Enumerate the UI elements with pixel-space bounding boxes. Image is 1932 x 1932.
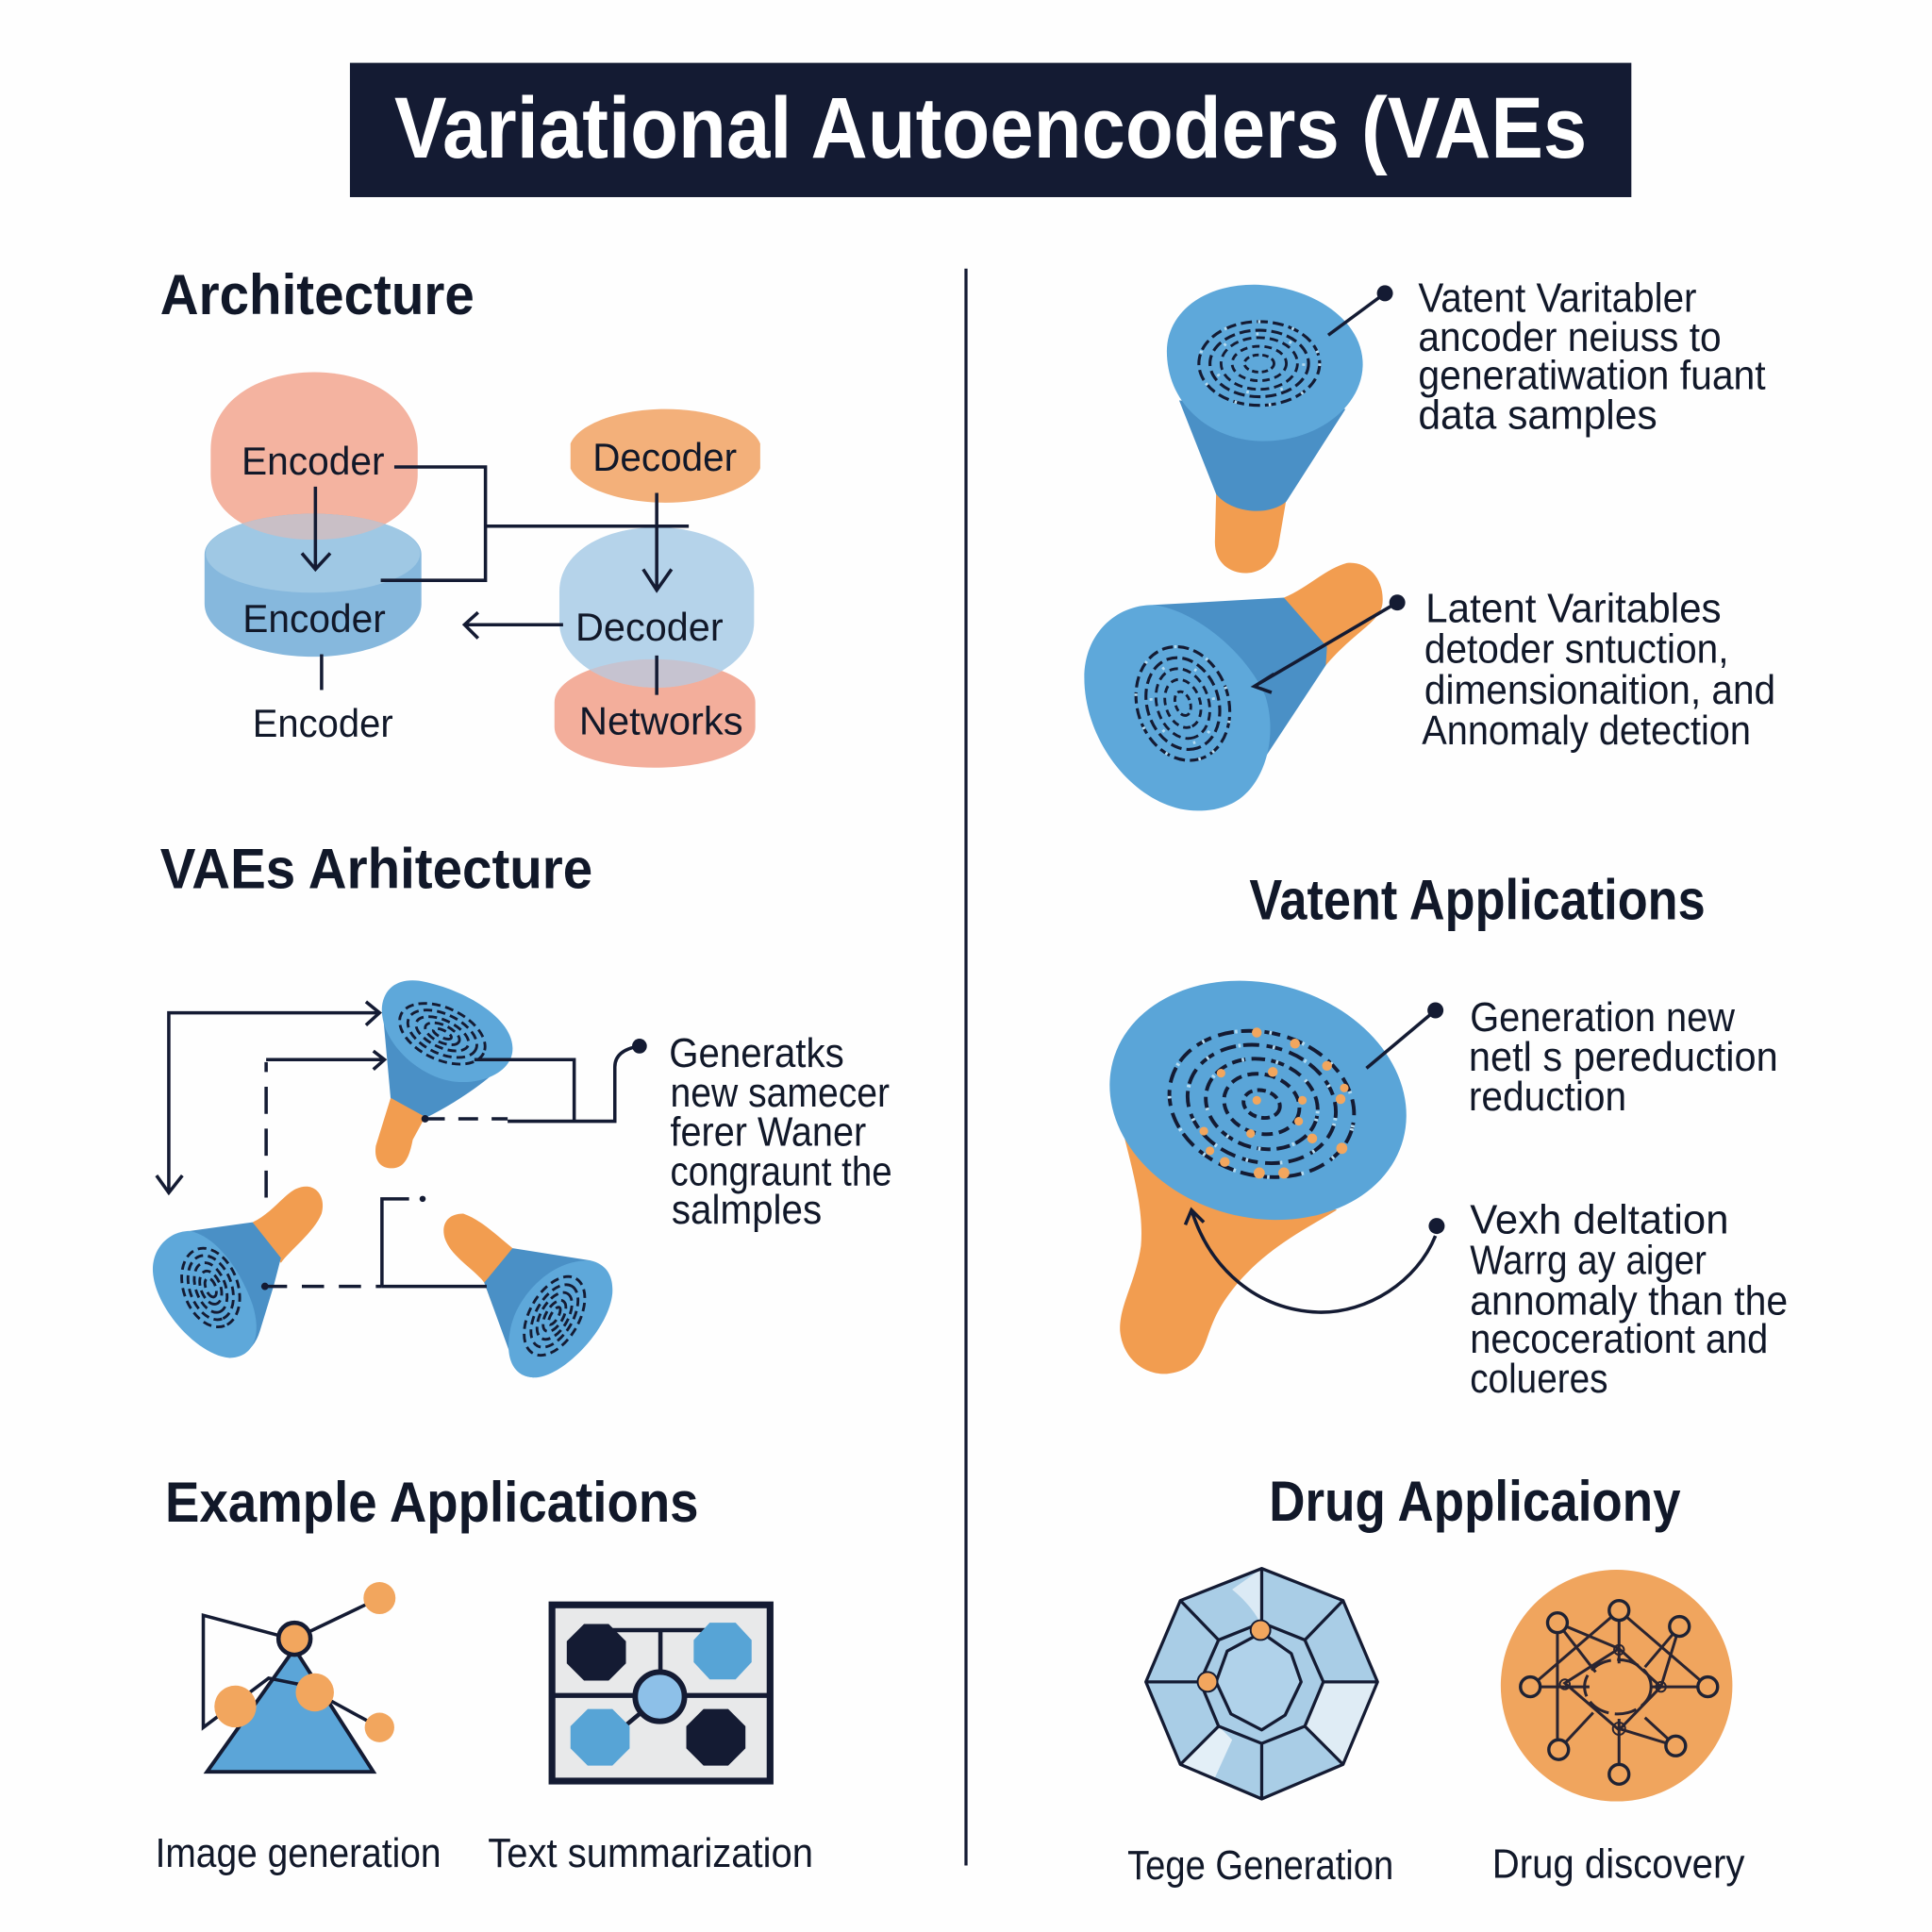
text block: anomaly: colueres bbox=[1470, 1357, 1607, 1402]
callout text: congraunt the bbox=[671, 1149, 892, 1194]
heading: Example Applications: Example Applications bbox=[165, 1471, 699, 1534]
text block: latent variables uses bbox=[1422, 587, 1775, 754]
cylinder labels: Encoder bbox=[242, 596, 386, 641]
orange ring dots bbox=[1200, 1027, 1349, 1178]
cylinder labels bbox=[242, 435, 743, 745]
label: drug discovery: Drug discovery bbox=[1492, 1842, 1745, 1888]
cone bottom left bbox=[153, 1187, 323, 1357]
callout text: new samecer bbox=[671, 1071, 890, 1116]
text block: latent variable description: ancoder neiuss to bbox=[1418, 315, 1722, 360]
text block: generation bbox=[1469, 995, 1778, 1120]
connector arrows bbox=[302, 467, 689, 695]
cone bottom right bbox=[443, 1214, 612, 1377]
callout text: salmples bbox=[672, 1188, 822, 1233]
cylinder labels: Decoder bbox=[575, 605, 724, 649]
text block: latent variable description: Vatent Varitabler bbox=[1418, 275, 1697, 321]
cone top bbox=[375, 980, 512, 1168]
cylinder labels: Networks bbox=[579, 698, 743, 742]
text block: anomaly: necocerationt and bbox=[1470, 1317, 1768, 1362]
icon: molecule on orange disc bbox=[1501, 1570, 1732, 1802]
decoder pill orange bbox=[571, 409, 760, 503]
label: tege generation: Tege Generation bbox=[1127, 1843, 1393, 1889]
heading: Architecture: Architecture bbox=[160, 263, 475, 326]
text block: latent variable description bbox=[1418, 275, 1766, 439]
text block: latent variable description: data samples bbox=[1418, 393, 1657, 439]
text block: latent variables uses: Latent Varitables bbox=[1425, 587, 1722, 632]
text block: generation: netl s pereduction bbox=[1469, 1035, 1778, 1080]
encoder cylinder blue bbox=[205, 514, 422, 657]
label: text summarization: Text summarization bbox=[488, 1831, 813, 1876]
text block: latent variables uses: detoder sntuction, bbox=[1424, 627, 1728, 673]
heading: Vatent Applications: Vatent Applications bbox=[1249, 868, 1706, 931]
text block: anomaly: Vexh deltation bbox=[1470, 1197, 1728, 1242]
decoder cylinder light blue bbox=[559, 527, 754, 688]
icon: faceted polyhedron bbox=[1146, 1569, 1377, 1799]
flow connector lines bbox=[157, 1002, 647, 1291]
heading: Drug Applicaiony: Drug Applicaiony bbox=[1269, 1470, 1681, 1533]
icon: text summarization board bbox=[552, 1605, 770, 1781]
text block: anomaly: Warrg ay aiger bbox=[1470, 1239, 1707, 1284]
text block: latent variable description: generatiwation fuant bbox=[1418, 354, 1766, 399]
text block: anomaly: annomaly than the bbox=[1470, 1279, 1788, 1324]
panel: architecture diagram bbox=[205, 372, 760, 768]
callout text: ferer Waner bbox=[671, 1110, 866, 1156]
center divider line bbox=[965, 269, 967, 1865]
cylinder labels: Encoder bbox=[242, 439, 385, 483]
title bbox=[350, 63, 1631, 197]
text block: latent variables uses: Annomaly detection bbox=[1422, 708, 1751, 754]
panel: latent variable cone top bbox=[1167, 285, 1393, 573]
text block: latent variables uses: dimensionaition, and bbox=[1424, 668, 1775, 713]
networks cylinder pink bbox=[555, 659, 756, 768]
text block: generation: reduction bbox=[1469, 1074, 1626, 1120]
cylinder labels: Encoder bbox=[253, 701, 393, 745]
text block: generation: Generation new bbox=[1470, 995, 1736, 1041]
text block: anomaly bbox=[1470, 1197, 1788, 1402]
encoder cylinder pink bbox=[210, 372, 418, 540]
title: Variational Autoencoders (VAEs bbox=[394, 80, 1587, 176]
panel: large cone with dotted rings bbox=[1083, 948, 1444, 1374]
callout text: Generatks bbox=[669, 1031, 844, 1076]
panel: three-cone flow diagram bbox=[153, 980, 892, 1377]
icon: image generation network bbox=[204, 1582, 395, 1772]
heading: VAEs Arhitecture: VAEs Arhitecture bbox=[160, 838, 592, 901]
panel: latent variable cone lower bbox=[1084, 563, 1406, 810]
label: image generation: Image generation bbox=[156, 1831, 441, 1876]
callout text bbox=[669, 1031, 892, 1233]
cylinder labels: Decoder bbox=[592, 435, 737, 479]
